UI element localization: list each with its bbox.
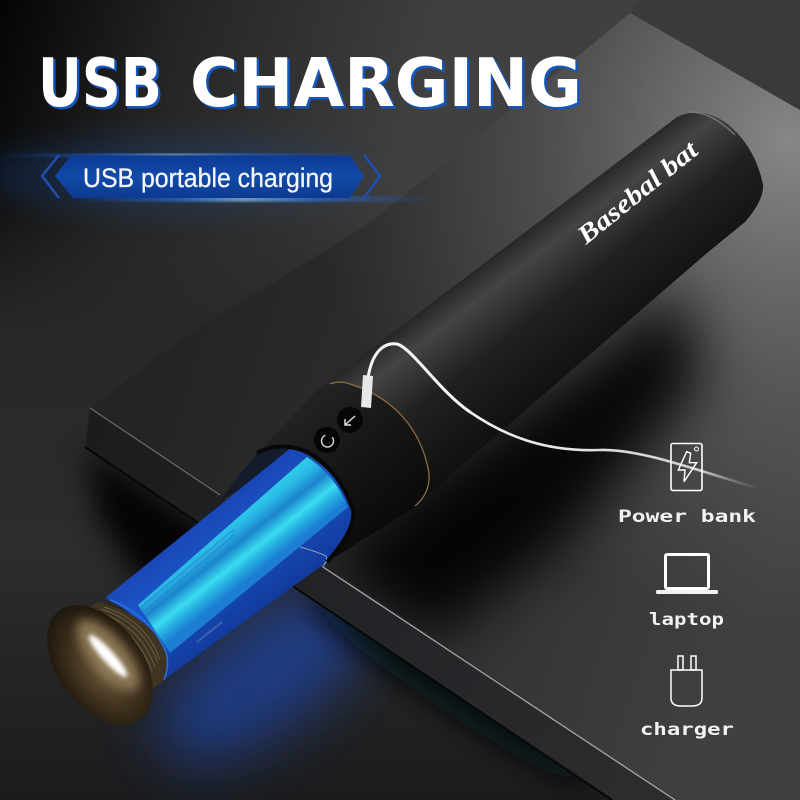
icon: charger (671, 656, 702, 706)
dome highlight (71, 614, 145, 696)
groove on tube (141, 530, 234, 611)
label: laptop: laptop (649, 610, 724, 630)
tube tab (300, 547, 326, 567)
subtitle text: USB portable charging (83, 163, 333, 193)
badge glow (0, 137, 440, 213)
tube lower highlight (197, 622, 222, 642)
title: USB (38, 44, 162, 122)
shadow and blue glow on floor (85, 447, 602, 800)
black upper body (317, 113, 763, 510)
gold ring (330, 382, 429, 506)
title: CHARGING (190, 44, 582, 122)
control section (257, 382, 429, 562)
clear tube top (220, 446, 310, 500)
label: charger: charger (640, 720, 734, 740)
icon: laptop (656, 554, 718, 594)
label: power bank: Power bank (618, 507, 756, 527)
tube rim (257, 446, 353, 562)
blue tube (105, 447, 353, 680)
title: USB (40, 46, 164, 124)
right chevron (364, 155, 380, 198)
subtitle badge (42, 155, 380, 198)
dome (26, 585, 174, 745)
icon: power bank (671, 444, 702, 490)
title: CHARGING (192, 46, 584, 124)
left chevron (42, 155, 59, 198)
end cap highlight (690, 112, 735, 135)
power button (314, 427, 340, 453)
white USB cable (361, 344, 757, 488)
title (38, 44, 584, 124)
product: bronze end cap (47, 599, 168, 725)
threads (82, 600, 168, 692)
product name: Basebal bat (571, 135, 704, 250)
arrow button (337, 407, 363, 433)
product: massage tube body (105, 112, 763, 680)
cyan light band (138, 457, 348, 653)
